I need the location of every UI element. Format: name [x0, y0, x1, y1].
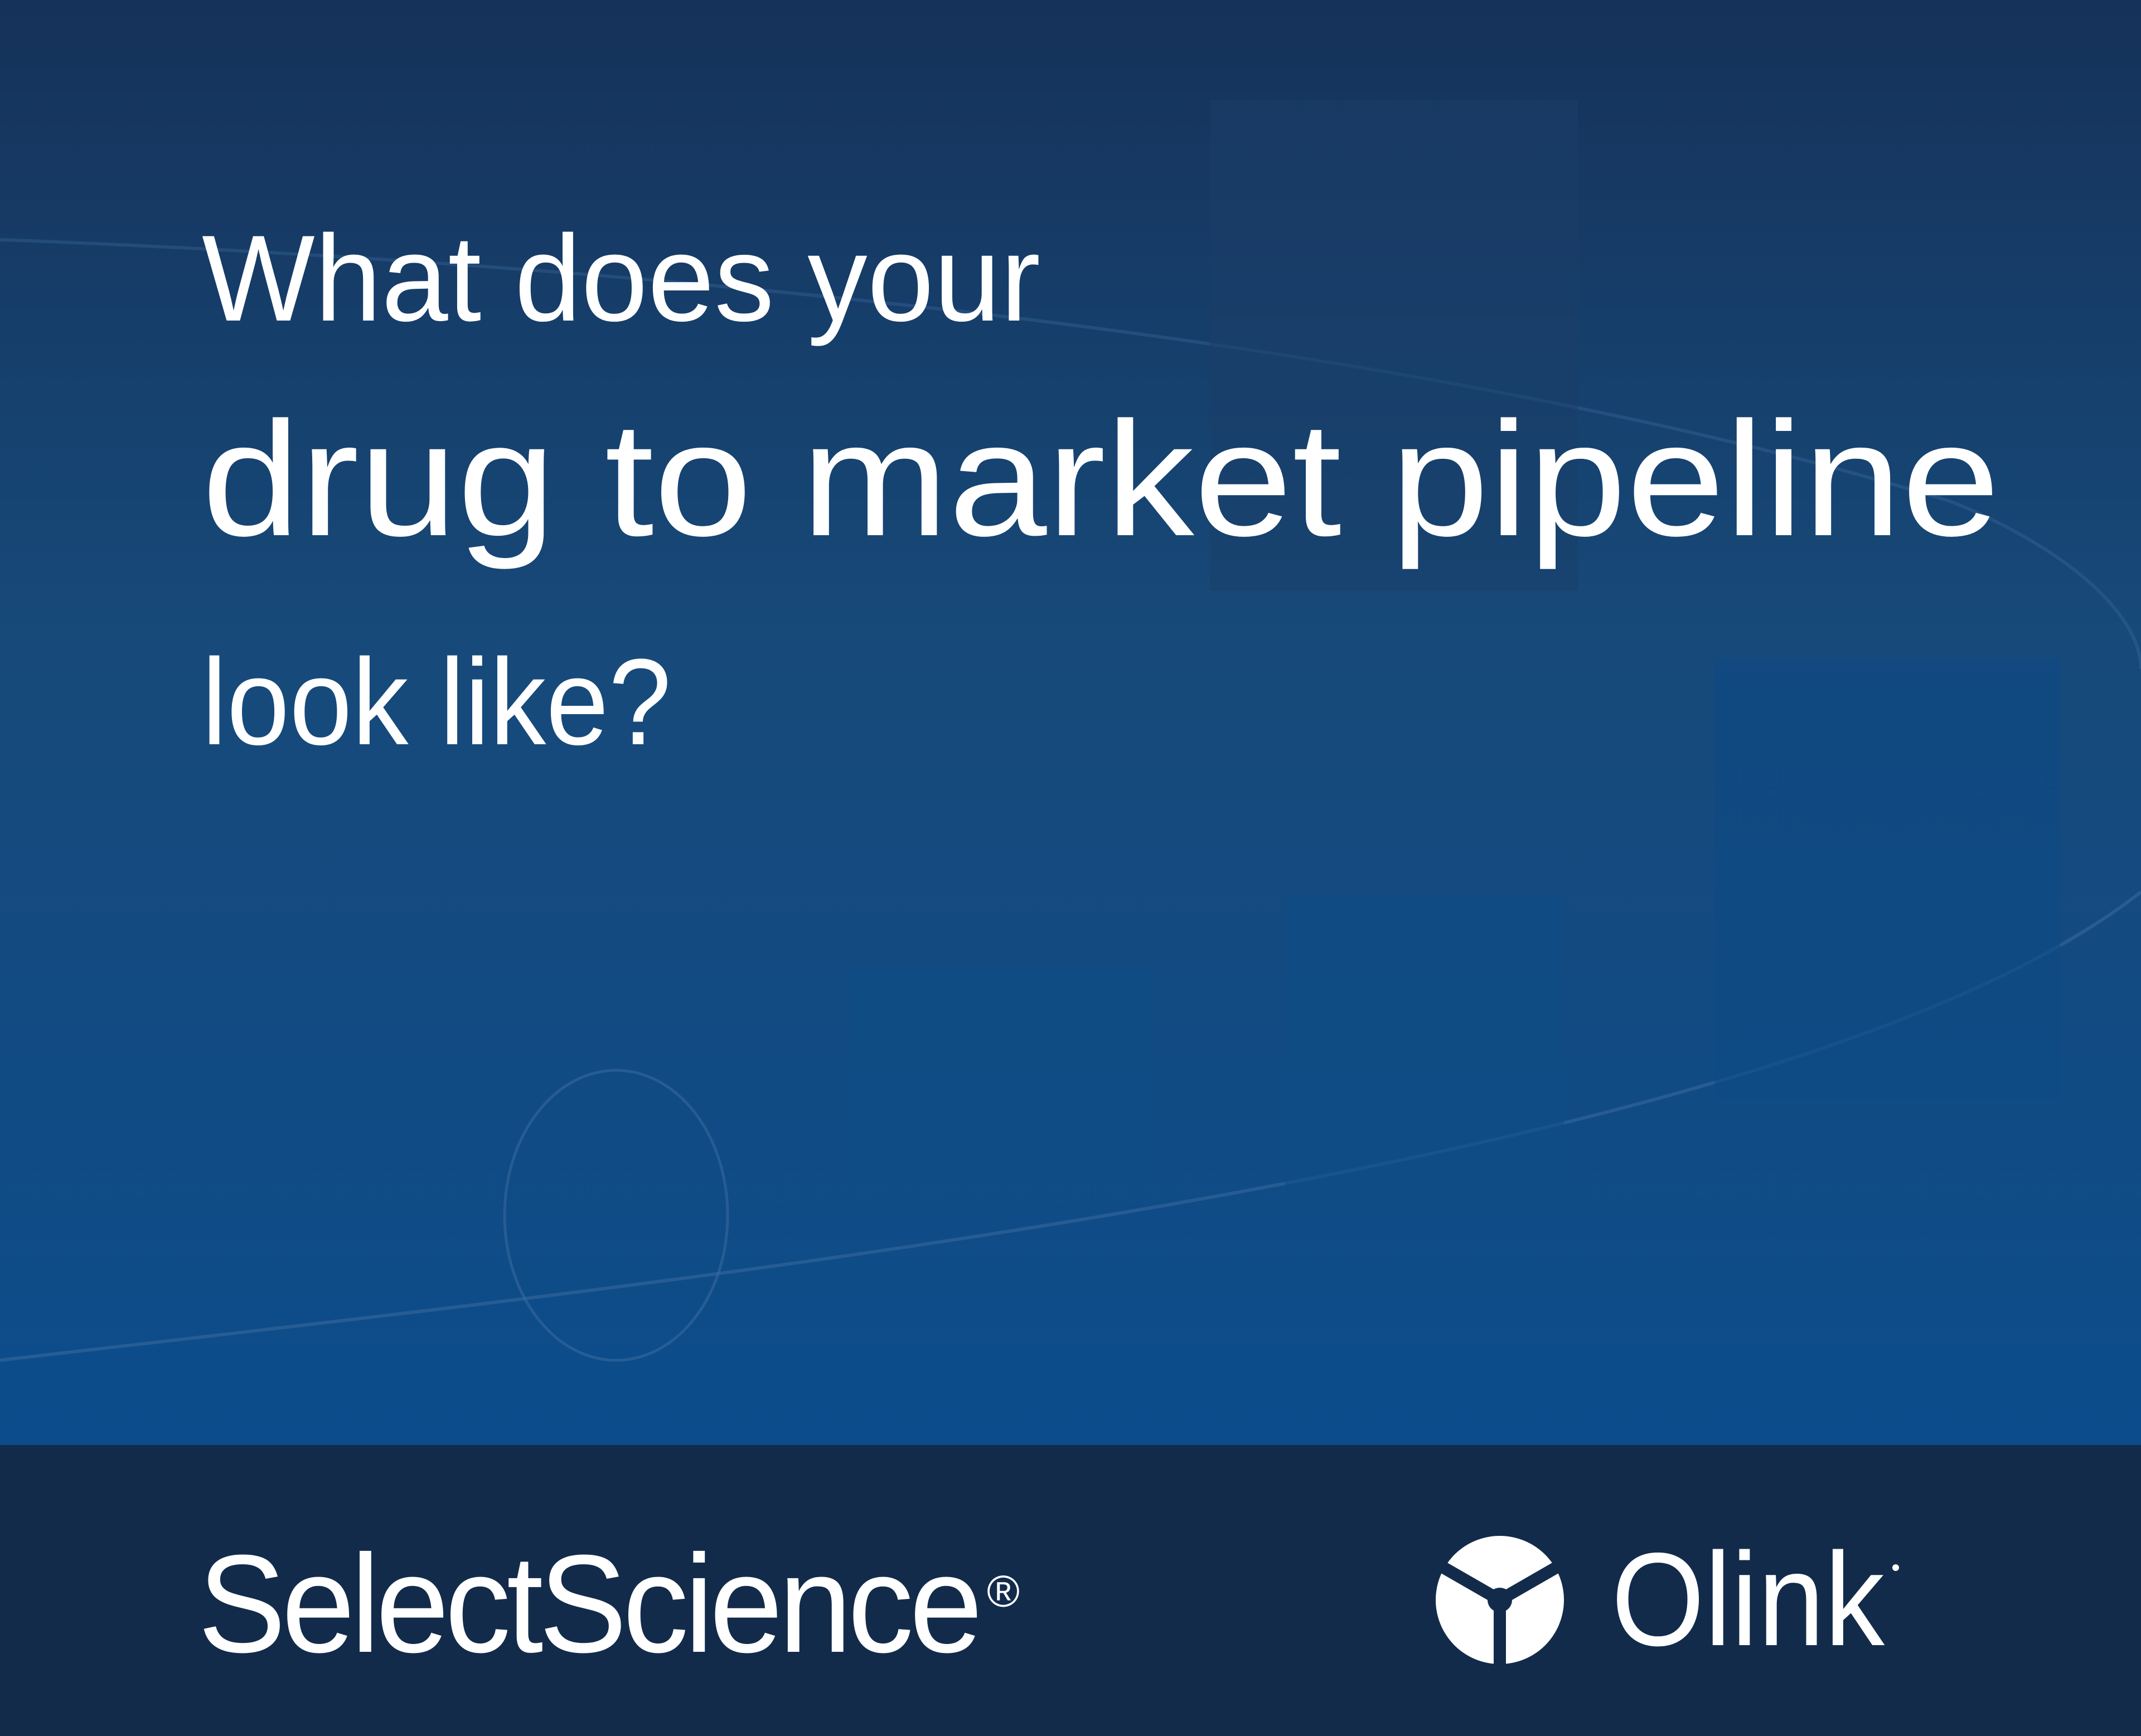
- icon: Olink mark: [1436, 1536, 1564, 1672]
- logo: SelectScience: ®: [987, 1567, 1020, 1616]
- title line 1: What does your: [202, 210, 1040, 347]
- logo: Olink: Olink: [1611, 1526, 1885, 1674]
- title line 3: look like?: [202, 633, 671, 770]
- footer: [0, 1445, 2141, 1736]
- logo: SelectScience: SelectScience: [198, 1526, 979, 1681]
- title line 2: drug to market pipeline: [202, 388, 2000, 571]
- logo: Olink: [1436, 1526, 1899, 1674]
- title: [202, 210, 2000, 770]
